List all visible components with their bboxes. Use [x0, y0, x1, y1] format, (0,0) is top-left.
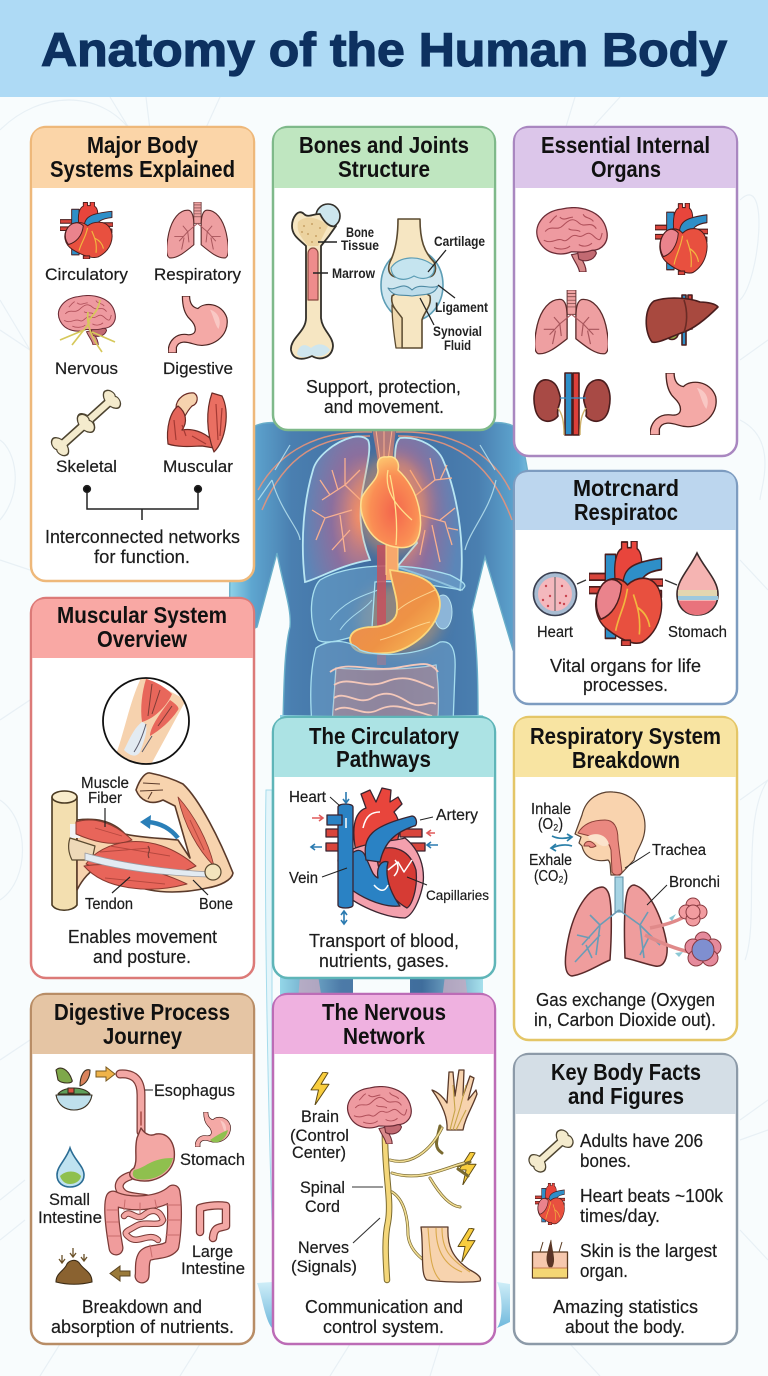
labels: knee: Ligament: [435, 300, 488, 315]
caption: about the body.: [565, 1316, 685, 1337]
labels: respiratory: Exhale: [529, 852, 572, 869]
stomach glow: [358, 582, 442, 654]
labels: nervous: Nerves: [298, 1238, 349, 1257]
label: nervous: Nervous: [55, 359, 118, 378]
icon: mini stomach: [195, 1112, 231, 1147]
labels: arm: Muscle: [81, 775, 129, 792]
label: respiratory: Respiratory: [154, 265, 241, 284]
icon: yellow arrow: [96, 1067, 115, 1081]
heading: Overview: [97, 626, 187, 652]
torso, shoulders and arms: [230, 422, 540, 720]
fact: skin: [580, 1240, 717, 1281]
labels: nervous: (Signals): [291, 1257, 357, 1276]
flexed arm diagram: [52, 773, 233, 910]
esophagus leader line: [145, 1089, 153, 1091]
heading: [541, 132, 710, 182]
labels: respiratory: (O₂): [538, 816, 563, 833]
labels: respiratory: [529, 801, 720, 891]
icon: waste: [56, 1248, 92, 1284]
labels: femur: [332, 225, 379, 281]
panel: essential internal organs: [514, 127, 737, 456]
heading: Muscular System: [57, 602, 227, 628]
caption: [45, 526, 240, 567]
caption: [553, 1296, 698, 1337]
icon: tissue drop: [677, 553, 718, 615]
fact: skin: Skin is the largest: [580, 1240, 717, 1261]
heading: Digestive Process: [54, 999, 230, 1025]
heading: [530, 723, 721, 773]
icon: digestive stomach: [168, 296, 227, 353]
label: muscular: Muscular: [163, 457, 233, 476]
icon: lungs: [535, 290, 608, 354]
icon: food bowl: [56, 1068, 92, 1110]
human body illustration: [230, 422, 540, 1328]
heading: Bones and Joints: [299, 132, 469, 158]
fact: bones: bones.: [580, 1150, 631, 1171]
labels: digestive: Esophagus: [154, 1081, 235, 1100]
heading: Respiratoc: [574, 499, 678, 525]
labels: knee: Fluid: [444, 338, 471, 353]
heading: Breakdown: [572, 747, 680, 773]
caption: [68, 926, 217, 967]
labels: respiratory: Inhale: [531, 801, 571, 818]
caption: absorption of nutrients.: [51, 1316, 234, 1337]
heading: Journey: [103, 1023, 182, 1049]
caption: in, Carbon Dioxide out).: [534, 1009, 716, 1030]
fact: skin: organ.: [580, 1260, 628, 1281]
icon: foot: [421, 1227, 481, 1282]
caption: [550, 655, 701, 695]
labels: heart diagram: Artery: [436, 807, 478, 824]
caption: [305, 1296, 463, 1337]
fact: bones: [580, 1130, 703, 1171]
icon: hand: [432, 1070, 477, 1130]
icon: brain: [537, 208, 607, 272]
labels: digestive: Large: [192, 1242, 233, 1261]
caption: Enables movement: [68, 926, 217, 947]
caption: [309, 930, 459, 971]
panel: key body facts: [514, 1054, 737, 1344]
heading: [322, 999, 446, 1049]
caption: Support, protection,: [306, 376, 461, 397]
caption: [534, 989, 716, 1030]
panel: respiratory system: [514, 717, 737, 1040]
panel: garbled heart and stomach panel: [514, 471, 737, 704]
fact: bones: Adults have 206: [580, 1130, 703, 1151]
heading: Essential Internal: [541, 132, 710, 158]
heading: Respiratory System: [530, 723, 721, 749]
labels: nervous: Center): [292, 1143, 346, 1162]
respiratory leader lines: [625, 852, 667, 905]
liver outline: [311, 566, 465, 642]
lung branches: [312, 458, 458, 562]
aorta and esophagus: [377, 545, 386, 665]
icon: big heart: [589, 541, 663, 646]
caption: Vital organs for life: [550, 655, 701, 676]
femur bone diagram: [291, 204, 340, 359]
heading: Structure: [338, 156, 430, 182]
icon: mini large intestine: [200, 1205, 226, 1238]
heading: Network: [343, 1023, 425, 1049]
labels: femur: Bone: [346, 225, 374, 240]
label: circulatory: Circulatory: [45, 265, 129, 284]
labels: knee: Cartilage: [434, 234, 485, 249]
heading: and Figures: [568, 1083, 684, 1109]
labels: nervous: Spinal: [300, 1178, 345, 1197]
icon: kidneys: [534, 373, 610, 435]
heading: [551, 1059, 701, 1109]
heading: Systems Explained: [50, 156, 235, 182]
caption: and posture.: [93, 946, 191, 967]
caption: nutrients, gases.: [319, 950, 449, 971]
breath arrows: [551, 834, 572, 851]
labels: arm: Tendon: [85, 896, 133, 913]
caption: and movement.: [324, 396, 444, 417]
labels: heart diagram: Capillaries: [426, 887, 489, 903]
labels: heart diagram: [289, 789, 489, 903]
labels: arm: Bone: [199, 896, 233, 913]
icon: bone: [526, 1127, 576, 1175]
connector lines: [577, 580, 677, 585]
labels: knee: Synovial: [433, 324, 482, 339]
caption: control system.: [323, 1316, 444, 1337]
label: digestive: Digestive: [163, 359, 233, 378]
large intestine: [311, 641, 455, 725]
heading: [54, 999, 230, 1049]
heading: [309, 723, 459, 772]
icon: nervous brain: [58, 296, 115, 352]
labels: arm: Fiber: [88, 790, 122, 807]
labels: digestive: Stomach: [180, 1150, 245, 1169]
heading: Key Body Facts: [551, 1059, 701, 1085]
shoulder vessels: [258, 432, 512, 520]
heading: Pathways: [336, 746, 431, 772]
caption: Amazing statistics: [553, 1296, 698, 1317]
pale arms and hands: [265, 790, 272, 1220]
heart: [361, 457, 421, 548]
labels: knee: [433, 234, 488, 353]
label: stomach: Stomach: [668, 624, 727, 641]
heart leader lines: [322, 797, 433, 885]
labels: digestive: Intestine: [38, 1208, 102, 1227]
labels: heart diagram: Heart: [289, 789, 327, 806]
caption: [51, 1296, 234, 1337]
label: heart: Heart: [537, 624, 574, 641]
lungs: [303, 436, 370, 582]
arm leader lines: [105, 808, 208, 895]
fact: heart: Heart beats ~100k: [580, 1185, 724, 1206]
panel: bones and joints: [273, 127, 495, 430]
stomach: [350, 570, 440, 654]
icon: bolt top: [311, 1072, 329, 1105]
magnified muscle circle: [103, 676, 189, 770]
alveoli clusters: [645, 898, 721, 966]
icon: skin layers: [532, 1240, 568, 1278]
labels: femur: Tissue: [341, 238, 379, 253]
icon: brown arrow: [110, 1266, 130, 1281]
icon: droplet: [57, 1148, 84, 1187]
heading: [299, 132, 469, 182]
fact: heart: [580, 1185, 724, 1226]
labels: respiratory: Trachea: [652, 842, 706, 859]
icon: muscular arm: [167, 393, 226, 452]
digestive tract: [106, 1074, 180, 1276]
icon: bolt middle: [459, 1152, 476, 1185]
icon: skeletal bones: [49, 388, 123, 458]
heading: Major Body: [87, 132, 198, 158]
panel: digestive process: [31, 994, 254, 1344]
labels: arm: [81, 775, 233, 913]
title: Anatomy of the Human Body: [41, 23, 727, 76]
heading: Organs: [591, 156, 661, 182]
label: skeletal: Skeletal: [56, 457, 117, 476]
labels: digestive: Small: [49, 1190, 90, 1209]
icon: blue movement arrow: [148, 822, 178, 838]
icon: circulatory heart: [60, 202, 113, 259]
caption: processes.: [583, 674, 668, 695]
large heart diagram: [326, 788, 425, 918]
heart glow: [354, 455, 430, 555]
nervous leader lines: [352, 1187, 383, 1243]
labels: heart diagram: Vein: [289, 870, 318, 887]
panel: muscular system: [31, 598, 254, 978]
labels: nervous: Brain: [301, 1107, 339, 1126]
legs: [280, 715, 483, 1000]
heading: [573, 475, 679, 525]
knee joint diagram: [381, 219, 455, 348]
icon: liver: [646, 295, 718, 345]
caption: Gas exchange (Oxygen: [536, 989, 715, 1010]
title banner: [0, 0, 768, 97]
labels: nervous: (Control: [290, 1126, 349, 1145]
icon: tissue circle: [534, 572, 576, 616]
panel: circulatory pathways: [273, 717, 495, 978]
labels: nervous: [290, 1107, 357, 1276]
head cross-section: [575, 792, 645, 875]
caption: [306, 376, 461, 417]
labels: respiratory: Bronchi: [669, 874, 720, 891]
icon: bolt lower: [458, 1228, 475, 1262]
caption: Transport of blood,: [309, 930, 459, 951]
spleen: [434, 595, 452, 629]
icon: respiratory lungs: [167, 202, 228, 258]
spinal cord and nerves: [385, 1126, 470, 1280]
heading: [57, 602, 227, 652]
connector bracket: [84, 486, 201, 520]
caption: Breakdown and: [82, 1296, 202, 1317]
trachea: [615, 877, 623, 912]
lungs cross-section: [565, 885, 667, 976]
heading: [50, 132, 235, 182]
heading: The Nervous: [322, 999, 446, 1025]
icon: network brain: [348, 1087, 411, 1144]
heading: Motrcnard: [573, 475, 679, 501]
labels: femur: Marrow: [332, 266, 375, 281]
labels: digestive: Intestine: [181, 1259, 245, 1278]
caption: Interconnected networks: [45, 526, 240, 547]
neck vessels: [372, 428, 396, 462]
panel: nervous network: [273, 994, 495, 1344]
icon: stomach: [650, 373, 716, 435]
icon: heart: [655, 203, 708, 275]
heading: The Circulatory: [309, 723, 459, 749]
caption: for function.: [94, 546, 190, 567]
labels: respiratory: (CO₂): [534, 868, 568, 885]
small flow arrows: [311, 792, 438, 924]
fact: heart: times/day.: [580, 1205, 660, 1226]
caption: Communication and: [305, 1296, 463, 1317]
icon: heart: [535, 1183, 565, 1225]
labels: digestive: [38, 1081, 245, 1278]
panel: major body systems: [31, 127, 254, 581]
labels: nervous: Cord: [305, 1197, 340, 1216]
small intestine: [332, 665, 439, 725]
